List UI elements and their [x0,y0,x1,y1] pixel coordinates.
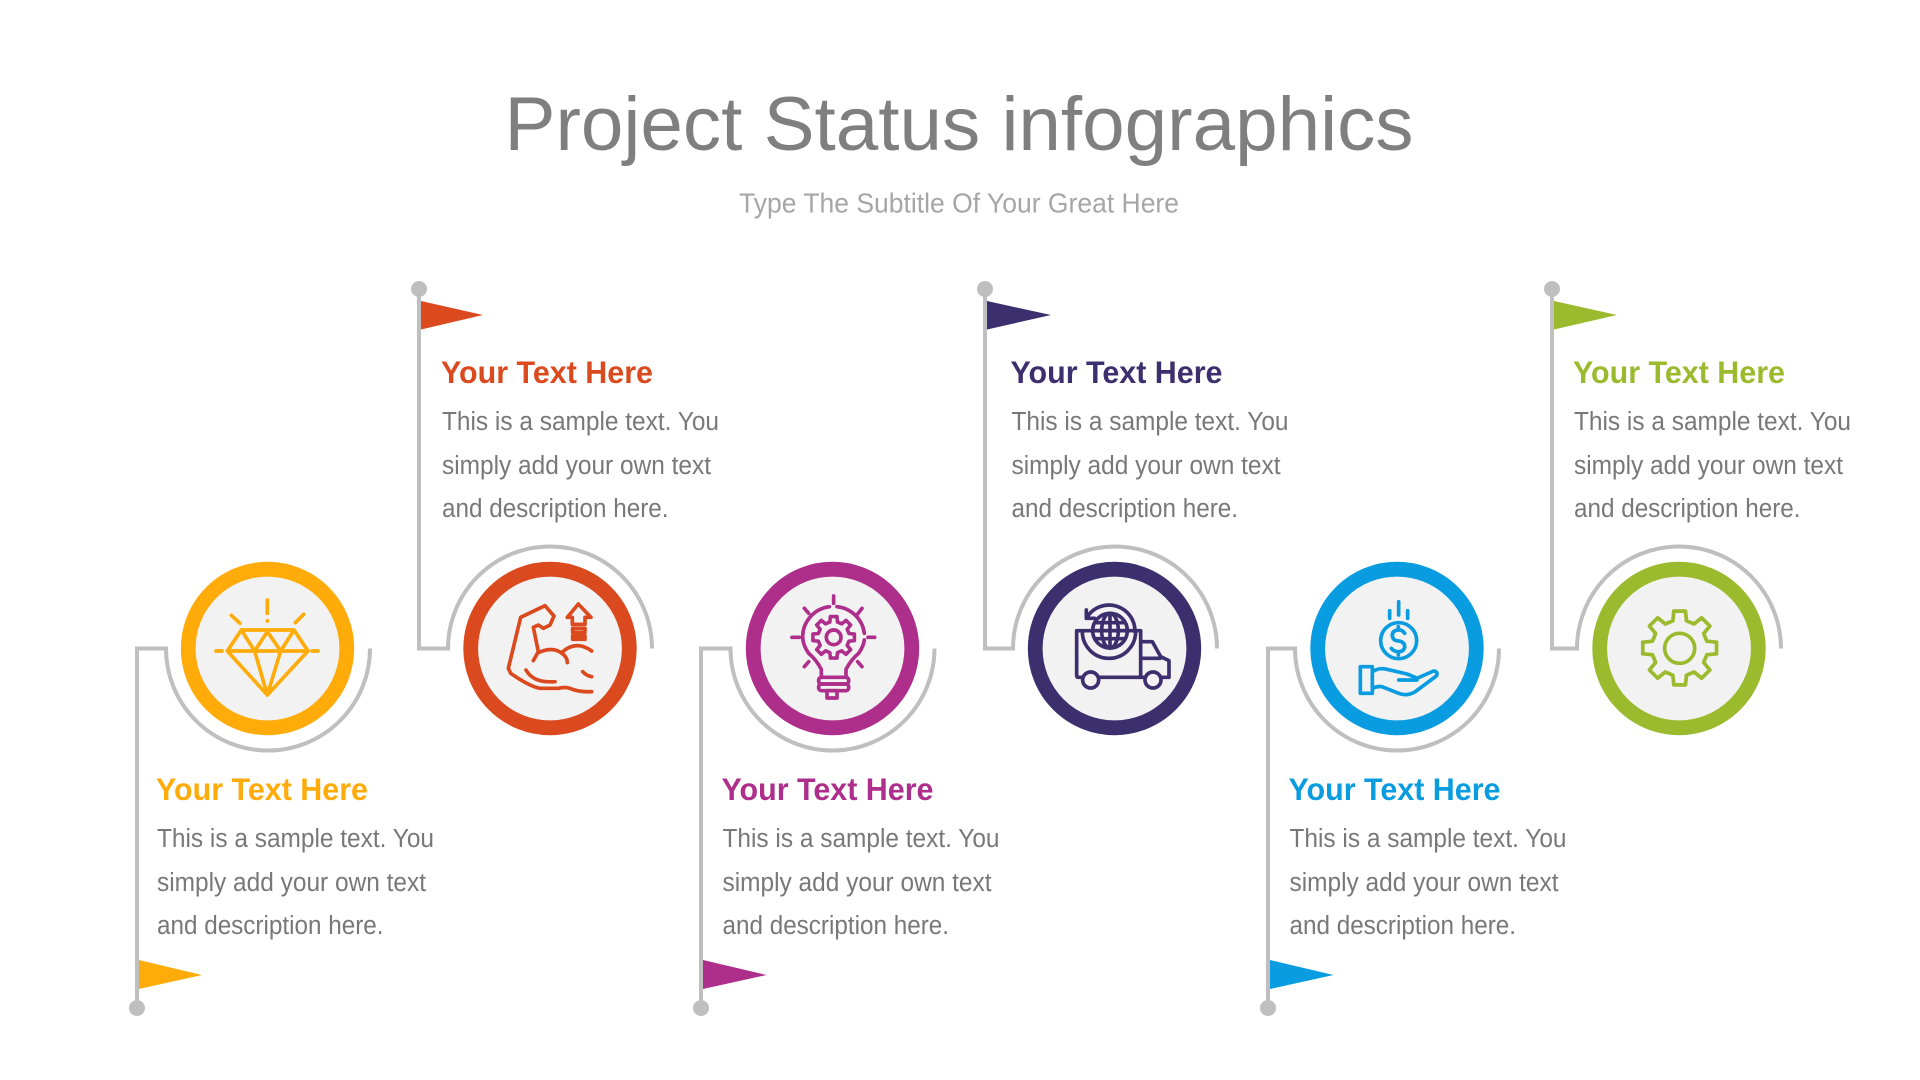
description: and description here. [1290,912,1516,940]
connector line [1552,289,1781,648]
pin dot [1544,281,1560,297]
panel: step 5 blue [1260,569,1566,1016]
connector line [419,289,652,648]
description [157,825,434,940]
icon: diamond [216,600,318,695]
pin dot [977,281,993,297]
connector line [701,648,934,1008]
description: This is a sample text. You [1012,408,1288,436]
icon: flexed muscle with arrow [508,604,592,692]
flag [1270,960,1334,989]
flag [139,960,202,989]
subtitle: Type The Subtitle Of Your Great Here [739,188,1179,218]
heading: Your Text Here [722,771,934,807]
icon: light bulb with gear [792,596,875,698]
flag [421,301,483,330]
panel: step 6 green [1544,281,1851,728]
icon: delivery truck with globe [1077,605,1169,688]
description: This is a sample text. You [722,825,1000,853]
description: and description here. [1012,495,1238,523]
pin dot [411,281,427,297]
panel: step 3 magenta [693,569,1000,1016]
flag [1554,301,1617,330]
circle badge [471,569,629,728]
connector line [985,289,1217,648]
flag [703,960,766,989]
description: and description here. [722,912,949,940]
description: This is a sample text. You [442,408,719,436]
description: simply add your own text [157,869,426,897]
pin dot [693,1000,709,1016]
circle badge [1318,569,1476,728]
icon: hand holding coin [1360,602,1437,695]
title: Project Status infographics [504,82,1414,167]
circle badge [753,569,912,728]
description: This is a sample text. You [157,825,434,853]
description [1290,825,1566,940]
description: simply add your own text [1574,452,1843,480]
description: This is a sample text. You [1290,825,1566,853]
description: and description here. [442,495,668,523]
description [722,825,1000,940]
panel: step 1 orange [129,569,434,1016]
circle badge [1600,569,1758,728]
description: and description here. [1574,495,1800,523]
description: This is a sample text. You [1574,408,1851,436]
description: and description here. [157,912,384,940]
heading: Your Text Here [1288,771,1500,807]
description: simply add your own text [1012,452,1280,480]
heading: Your Text Here [1010,354,1222,390]
description [1574,408,1851,523]
panel: step 4 purple [977,281,1288,728]
description [1012,408,1288,523]
icon: gear [1643,611,1717,685]
circle badge [1035,569,1194,728]
description: simply add your own text [1290,869,1558,897]
pin dot [1260,1000,1276,1016]
flag [987,301,1051,330]
description: simply add your own text [722,869,992,897]
circle badge [188,569,347,728]
connector line [137,648,370,1008]
heading: Your Text Here [156,771,368,807]
connector line [1268,648,1499,1008]
panel: step 2 red [411,281,719,728]
description: simply add your own text [442,452,711,480]
heading: Your Text Here [441,354,653,390]
description [442,408,719,523]
pin dot [129,1000,145,1016]
heading: Your Text Here [1573,354,1785,390]
